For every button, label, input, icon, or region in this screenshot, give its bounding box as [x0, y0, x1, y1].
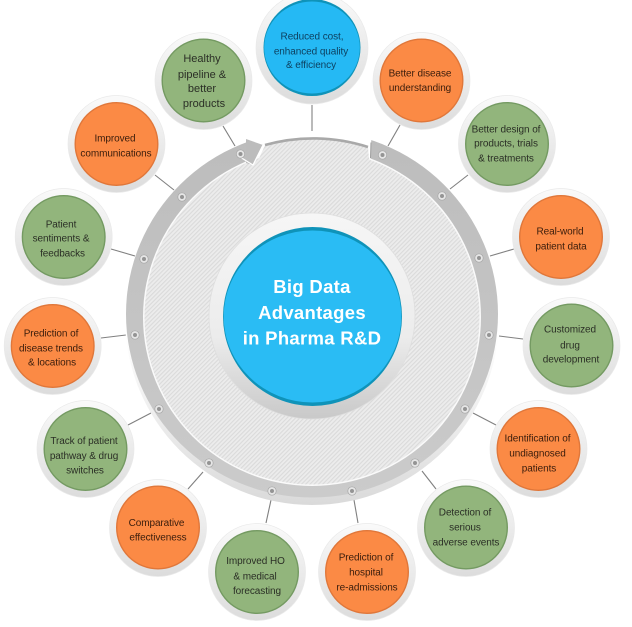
- node: Better design: Better design of: [472, 124, 541, 136]
- node: Patient sentiments & feedbacks: feedbacks: [40, 248, 85, 260]
- node: Track of patient pathway & drug switches: [37, 400, 134, 498]
- node: Prediction of disease trends & locations: & locations: [28, 358, 76, 368]
- rivets: [131, 150, 493, 495]
- ring outer shading: [125, 131, 499, 505]
- node: Healthy pipeline: products: [183, 98, 226, 110]
- node: Identification of undiagnosed patients: patients: [522, 464, 556, 474]
- node: Prediction of disease trends & locations: [4, 298, 101, 394]
- title: Advantages: [258, 302, 366, 323]
- node: Customized drug development: development: [543, 354, 599, 366]
- node: Detection of serious adverse events: serious: [449, 522, 481, 534]
- node: Better disease understanding: Better disease: [389, 68, 452, 80]
- node: Real-world patient data: patient data: [535, 242, 587, 252]
- node: Identification of undiagnosed patients: undiagnosed: [509, 448, 566, 460]
- node: Patient sentiments & feedbacks: sentiments &: [33, 234, 90, 244]
- node: Reduced cost: enhanced quality: [274, 46, 348, 58]
- node: Prediction of hospital re-admissions: hospital: [349, 568, 383, 578]
- circular arrow band: [126, 130, 498, 498]
- node: Better design: [458, 96, 556, 192]
- node: Prediction of disease trends & locations: disease trends: [19, 344, 83, 354]
- node: Detection of serious adverse events: adverse events: [433, 538, 499, 548]
- node: Better disease understanding: understanding: [389, 83, 451, 94]
- center hub: Big Data Advantages in Pharma R&D: [209, 213, 415, 419]
- node: Real-world patient data: Real-world: [536, 226, 584, 238]
- node: Patient sentiments & feedbacks: [15, 188, 112, 286]
- node: Patient sentiments & feedbacks: Patient: [46, 220, 77, 230]
- node: Real-world patient data: [512, 188, 610, 286]
- node: Improved HO & medical forecasting: & medical: [233, 572, 277, 582]
- node: Track of patient pathway & drug switches: pathway & drug: [50, 451, 118, 462]
- node: Prediction of hospital re-admissions: Prediction of: [339, 552, 394, 564]
- node: Prediction of hospital re-admissions: re-admissions: [336, 582, 398, 594]
- node: Healthy pipeline: better: [188, 83, 216, 95]
- node: Identification of undiagnosed patients: [490, 400, 587, 498]
- connector lines: [101, 105, 523, 523]
- node: Better disease understanding: [373, 32, 470, 130]
- node: Detection of serious adverse events: [418, 480, 514, 576]
- node: Identification of undiagnosed patients: Identification of: [505, 434, 571, 444]
- node: Improved communications: Improved: [94, 134, 136, 144]
- node: Improved communications: communications: [80, 148, 152, 160]
- node: Customized drug development: Customized: [544, 324, 596, 336]
- node: Track of patient pathway & drug switches: Track of patient: [50, 436, 118, 447]
- node: Detection of serious adverse events: Detection of: [439, 508, 492, 518]
- node: Track of patient pathway & drug switches: switches: [66, 466, 104, 476]
- node: Prediction of hospital re-admissions: [318, 524, 416, 620]
- node: Better design: & treatments: [478, 154, 534, 164]
- central ring diagram: [125, 130, 499, 505]
- node: Customized drug development: [523, 298, 620, 394]
- node: Comparative effectiveness: effectiveness: [129, 532, 187, 544]
- node: Healthy pipeline: [155, 32, 252, 130]
- node: Customized drug development: drug: [560, 340, 580, 352]
- title: Big Data: [273, 276, 351, 297]
- title: in Pharma R&D: [243, 328, 381, 348]
- node: Reduced cost: Reduced cost,: [281, 32, 343, 42]
- node: Better design: products, trials: [474, 138, 538, 150]
- node: Healthy pipeline: Healthy: [183, 53, 221, 65]
- hatched disc: [142, 138, 482, 487]
- node: Reduced cost: [256, 0, 368, 104]
- node: Improved HO & medical forecasting: forecasting: [233, 586, 281, 597]
- node: Improved communications: [68, 96, 165, 192]
- node: Healthy pipeline: pipeline &: [178, 69, 227, 81]
- node: Prediction of disease trends & locations: Prediction of: [24, 328, 79, 340]
- node: Improved HO & medical forecasting: Improved HO: [226, 556, 285, 567]
- node: Comparative effectiveness: [110, 480, 206, 576]
- node: Comparative effectiveness: Comparative: [129, 518, 185, 529]
- node: Improved HO & medical forecasting: [208, 524, 306, 620]
- node: Reduced cost: & efficiency: [286, 60, 336, 71]
